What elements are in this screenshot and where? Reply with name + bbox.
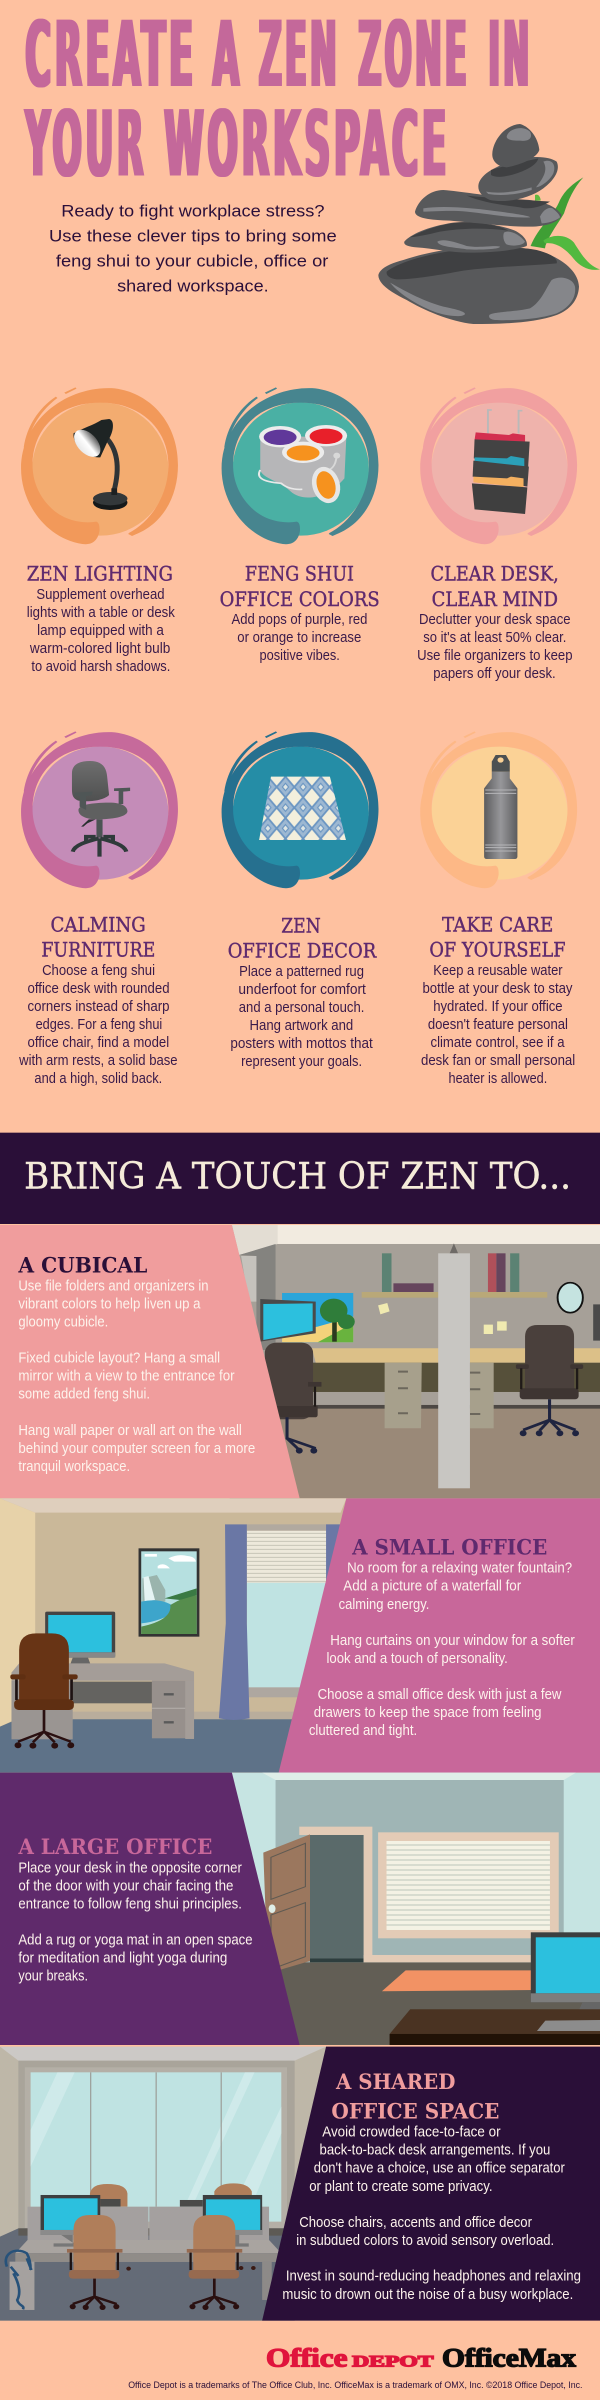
yoga mat — [382, 1970, 536, 1991]
heading: FENG SHUI — [245, 563, 354, 585]
panel: clear desk clear mind — [417, 387, 577, 682]
heading: CALMING — [51, 914, 146, 936]
text block: Place a patterned rug — [239, 963, 364, 980]
footer logos: DEPOT — [352, 2353, 434, 2370]
door and frame — [263, 1827, 372, 1973]
text block: of the door with your chair facing the — [18, 1878, 233, 1894]
intro text — [49, 202, 337, 295]
headphones — [6, 2251, 31, 2309]
heading: CLEAR MIND — [432, 588, 558, 611]
icon: teal brush circle — [222, 387, 378, 544]
intro text: shared workspace. — [117, 277, 269, 295]
heading: OFFICE DECOR — [228, 940, 377, 962]
desk — [11, 1663, 194, 1739]
text block — [417, 611, 573, 682]
text block: edges. For a feng shui — [36, 1016, 162, 1033]
header section — [25, 2, 600, 324]
tips row 2 — [18, 731, 577, 1087]
scene: large office — [230, 1773, 600, 2045]
heading: A LARGE OFFICE — [17, 1834, 212, 1860]
footer logos — [266, 2343, 577, 2373]
icon: zen stones and plant — [378, 110, 600, 324]
text block: heater is allowed. — [449, 1070, 547, 1087]
heading — [228, 915, 377, 962]
icon: purple brush circle — [21, 731, 178, 888]
text block — [282, 2124, 581, 2303]
heading — [331, 2069, 499, 2124]
right monitor — [203, 2195, 262, 2247]
text block: underfoot for comfort — [238, 981, 366, 998]
text block — [18, 1278, 255, 1475]
desks and partitions — [10, 2199, 281, 2310]
icon: water bottle — [484, 755, 517, 859]
heading: OFFICE SPACE — [331, 2099, 499, 2124]
window — [31, 2072, 281, 2222]
title: A — [213, 2, 243, 108]
monitor — [45, 1612, 115, 1672]
text block: Hang wall paper or wall art on the wall — [18, 1422, 242, 1439]
panel: zen lighting — [21, 387, 178, 675]
text block: entrance to follow feng shui principles. — [18, 1896, 242, 1912]
heading: TAKE CARE — [442, 914, 553, 936]
heading: CLEAR DESK, — [431, 563, 559, 585]
text block: for meditation and light yoga during — [18, 1950, 227, 1966]
wall art: beach — [282, 1293, 355, 1342]
panel: shared office text — [262, 2047, 600, 2321]
shelves and books — [362, 1253, 547, 1298]
text block: Hang artwork and — [250, 1017, 353, 1034]
heading: A SMALL OFFICE — [351, 1535, 547, 1560]
section: a large office — [0, 1773, 600, 2045]
scene: cubicle — [230, 1225, 600, 1498]
mirror — [558, 1283, 583, 1313]
panel: feng shui office colors — [220, 387, 380, 664]
far chairs — [90, 2183, 252, 2207]
text block: lamp equipped with a — [37, 622, 164, 639]
heading: ZEN LIGHTING — [27, 563, 173, 585]
icon: desk lamp — [69, 419, 127, 510]
footer logos: OfficeMax — [442, 2343, 577, 2373]
intro text: Ready to fight workplace stress? — [61, 202, 325, 220]
text block: tranquil workspace. — [18, 1458, 130, 1475]
heading: A SHARED — [335, 2069, 455, 2095]
text block: hydrated. If your office — [433, 998, 563, 1015]
text block: behind your computer screen for a more — [18, 1440, 255, 1457]
text block: Add a picture of a waterfall for — [343, 1578, 522, 1594]
icon: paint cans — [259, 425, 347, 505]
monitor — [531, 1932, 600, 2017]
text block: Avoid crowded face-to-face or — [322, 2124, 501, 2140]
icon: orange brush circle — [21, 387, 178, 544]
panel: cubical text — [0, 1225, 300, 1498]
scene: small office — [0, 1498, 348, 1773]
title — [25, 2, 532, 198]
title: ZEN — [259, 2, 340, 108]
text block: represent your goals. — [241, 1053, 362, 1070]
window with blinds — [378, 1832, 559, 1938]
text block: your breaks. — [18, 1968, 88, 1984]
heading: FURNITURE — [41, 939, 155, 961]
text block: and a high, solid back. — [34, 1070, 162, 1087]
footer logos: Office — [266, 2343, 347, 2373]
text block: vibrant colors to help liven up a — [18, 1296, 201, 1312]
heading — [41, 914, 155, 961]
icon: yellow brush circle — [420, 731, 577, 888]
left chair — [67, 2215, 122, 2310]
second chair — [516, 1325, 583, 1436]
text block — [309, 1560, 575, 1739]
scene: shared office — [0, 2047, 329, 2321]
text block: Add a rug or yoga mat in an open space — [18, 1932, 253, 1948]
section: a small office — [0, 1498, 600, 1773]
text block: Choose a feng shui — [42, 962, 155, 979]
text block: warm-colored light bulb — [29, 640, 170, 657]
heading — [431, 563, 559, 611]
text block: papers off your desk. — [433, 665, 556, 682]
chair — [265, 1343, 321, 1454]
heading: ZEN — [281, 915, 321, 937]
text block: Choose chairs, accents and office decor — [299, 2214, 532, 2231]
text block: Use file folders and organizers in — [18, 1278, 209, 1294]
heading: OFFICE COLORS — [220, 588, 380, 611]
text block: Add pops of purple, red — [232, 611, 367, 628]
panel: calming furniture — [18, 731, 178, 1087]
text block: office desk with rounded — [28, 980, 170, 997]
wall art: waterfall — [139, 1548, 199, 1637]
heading: A CUBICAL — [17, 1253, 147, 1278]
desk — [390, 2009, 600, 2045]
right chair — [126, 2215, 256, 2310]
panel: zen office decor — [222, 731, 378, 1070]
text block: calming energy. — [339, 1596, 429, 1613]
text block: office chair, find a model — [28, 1034, 169, 1051]
column partition — [438, 1243, 470, 1488]
heading: OF YOURSELF — [429, 939, 566, 961]
text block: to avoid harsh shadows. — [31, 658, 170, 675]
text block: Place your desk in the opposite corner — [18, 1860, 242, 1876]
text block: gloomy cubicle. — [18, 1314, 108, 1330]
panel: take care of yourself — [420, 731, 577, 1087]
text block: Supplement overhead — [36, 586, 165, 603]
tips row 1 — [21, 387, 577, 682]
text block: or plant to create some privacy. — [309, 2178, 493, 2195]
text block: posters with mottos that — [230, 1035, 373, 1052]
text block — [421, 962, 575, 1087]
panel: large office text — [0, 1773, 300, 2045]
left monitor — [41, 2195, 100, 2247]
text block — [18, 1860, 253, 1984]
text block: some added feng shui. — [18, 1386, 150, 1402]
sticky notes — [378, 1303, 507, 1334]
section: a shared office space — [0, 2047, 600, 2391]
title: YOUR — [25, 92, 147, 198]
monitor — [260, 1299, 316, 1342]
icon: pink brush circle — [420, 387, 577, 544]
text block: and a personal touch. — [239, 999, 364, 1016]
heading — [429, 914, 566, 961]
icon: blue brush circle — [222, 731, 378, 888]
text block: lights with a table or desk — [27, 604, 176, 621]
intro text: feng shui to your cubicle, office or — [56, 252, 328, 270]
text block: with arm rests, a solid base — [18, 1052, 178, 1069]
title: CREATE — [25, 2, 197, 108]
icon: patterned rug — [259, 777, 346, 840]
text block: positive vibes. — [259, 647, 340, 664]
dark heading band — [0, 1133, 600, 1224]
text block: or orange to increase — [237, 629, 361, 646]
text block: mirror with a view to the entrance for — [18, 1368, 235, 1384]
text block: Fixed cubicle layout? Hang a small — [18, 1350, 220, 1366]
icon: file organizer — [472, 410, 530, 514]
intro text: Use these clever tips to bring some — [49, 227, 337, 245]
text block: corners instead of sharp — [28, 998, 170, 1015]
heading — [220, 563, 380, 611]
window with curtains — [219, 1524, 341, 1720]
text block — [232, 611, 367, 664]
text block: cluttered and tight. — [309, 1722, 417, 1739]
text block — [230, 963, 373, 1070]
chair — [10, 1633, 78, 1749]
text block — [18, 962, 178, 1087]
text block — [27, 586, 176, 675]
icon: office chair — [72, 761, 130, 857]
text block: look and a touch of personality. — [326, 1650, 508, 1667]
section: a cubical — [0, 1133, 600, 1498]
panel: small office text — [279, 1498, 600, 1773]
second monitor — [593, 1304, 600, 1341]
